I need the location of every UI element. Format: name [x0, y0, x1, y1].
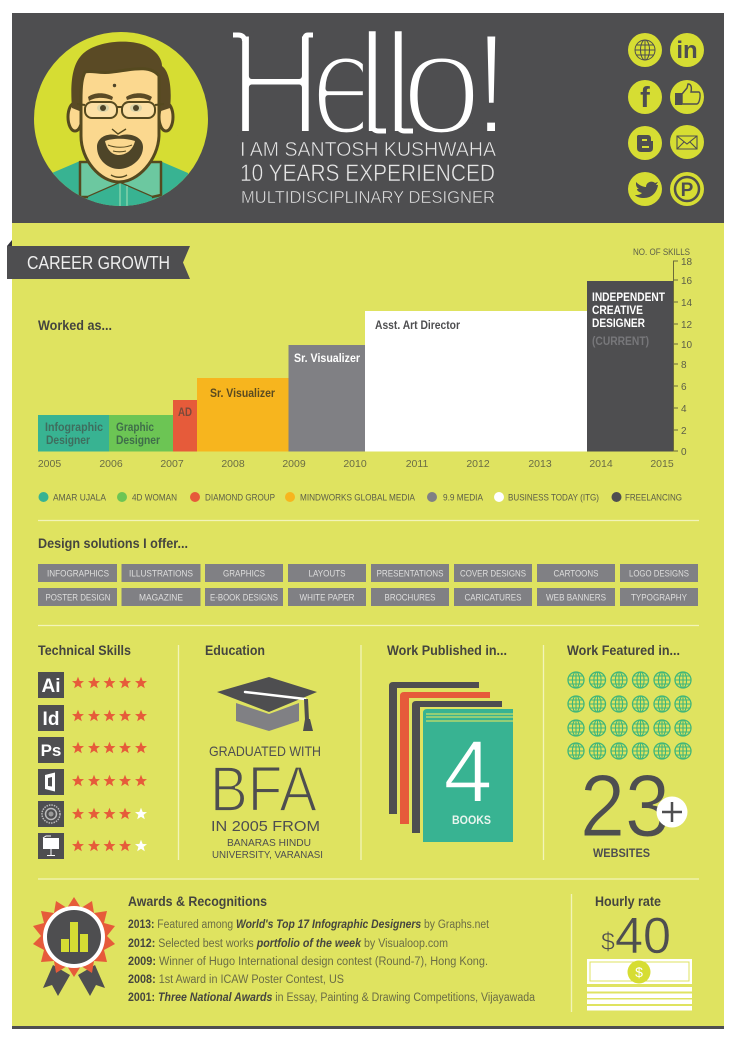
year labels: 2007 — [160, 458, 184, 470]
service tags: LOGO DESIGNS — [629, 568, 689, 580]
awards and recognitions: 2012: Selected best works portfolio of the week by Visualoop.com — [128, 938, 448, 950]
bar: Asst. Art Director — [365, 311, 587, 452]
heading: design solutions: Design solutions I offer... — [38, 536, 188, 551]
plus badge — [656, 796, 688, 828]
education text — [209, 743, 323, 861]
bar: Infographic Designer — [38, 415, 109, 452]
year labels — [38, 458, 674, 470]
icon: blogger — [628, 126, 662, 160]
ribbon heading: career growth: CAREER GROWTH — [27, 252, 170, 273]
book stack — [389, 682, 513, 842]
panel: work featured — [567, 643, 691, 860]
education text: IN 2005 FROM — [211, 818, 320, 835]
bar: Infographic Designer: Designer — [46, 433, 90, 447]
website count: 23 — [580, 756, 670, 855]
bar: Independent Creative Designer — [587, 281, 673, 452]
panel: education — [205, 643, 323, 861]
skills axis: 18 — [681, 257, 693, 268]
panel: work published: Work Published in... — [387, 643, 507, 658]
chart legend: FREELANCING — [625, 492, 682, 504]
icon: linkedin: in — [676, 37, 698, 64]
bar: Sr. Visualizer orange — [197, 378, 288, 452]
skill icon: InDesign: Id — [43, 709, 59, 730]
bar: AD: AD — [178, 405, 192, 419]
icon: award medal — [33, 897, 115, 996]
service tags: CARICATURES — [464, 592, 522, 604]
header panel — [12, 2, 724, 223]
career bar chart — [38, 247, 693, 470]
title: Hello!: l — [356, 2, 388, 165]
title: Hello!: H — [229, 3, 322, 166]
heading: worked as: Worked as... — [38, 318, 112, 333]
education text: BANARAS HINDU — [227, 837, 311, 849]
subtitle lines: 10 YEARS EXPERIENCED — [240, 160, 495, 187]
icon: pinterest — [670, 172, 704, 206]
service tags: CARTOONS — [554, 568, 598, 580]
panel: hourly rate — [587, 894, 692, 1010]
globe grid — [568, 672, 691, 759]
skill icon: Presentation — [38, 833, 64, 859]
bar: Graphic Designer — [109, 415, 173, 452]
skills axis: NO. OF SKILLS — [633, 247, 690, 257]
service tags: WHITE PAPER — [300, 592, 355, 604]
service tags — [38, 564, 698, 606]
bar: Infographic Designer: Infographic — [45, 420, 103, 434]
bar: Independent Creative Designer: DESIGNER — [592, 316, 645, 330]
subtitle lines — [240, 139, 497, 207]
bar: Independent Creative Designer: (CURRENT) — [592, 334, 649, 348]
icon: cash stack: $ — [635, 964, 643, 980]
bar: Asst. Art Director: Asst. Art Director — [375, 318, 460, 332]
bar: Independent Creative Designer: INDEPENDENT — [592, 290, 666, 304]
year labels: 2010 — [343, 458, 367, 470]
year labels: 2012 — [466, 458, 490, 470]
icon: mail — [670, 125, 704, 159]
education text: GRADUATED WITH — [209, 743, 321, 759]
skills axis: 2 — [681, 426, 687, 437]
awards and recognitions: 2013: Featured among World's Top 17 Infographic Designers by Graphs.net — [128, 919, 490, 931]
skills axis: 10 — [681, 340, 693, 351]
skills axis: 0 — [681, 447, 687, 458]
chart legend — [38, 492, 682, 504]
skills axis: 4 — [681, 404, 687, 415]
subtitle lines: MULTIDISCIPLINARY DESIGNER — [241, 187, 495, 207]
skill icon: Photoshop — [38, 737, 64, 763]
year labels: 2006 — [99, 458, 123, 470]
panel: technical skills: Technical Skills — [38, 643, 131, 658]
title: Hello!: o — [401, 2, 482, 165]
icon: thumbs up — [670, 80, 704, 114]
chart legend: AMAR UJALA — [53, 492, 107, 504]
chart legend: DIAMOND GROUP — [205, 492, 275, 504]
chart legend: MINDWORKS GLOBAL MEDIA — [300, 492, 416, 504]
body panel — [12, 223, 724, 1027]
education text: UNIVERSITY, VARANASI — [212, 849, 323, 861]
service tags: MAGAZINE — [139, 592, 183, 604]
skills axis: 16 — [681, 276, 693, 287]
avatar portrait — [34, 32, 208, 210]
awards and recognitions: 2001: Three National Awards in Essay, Painting & Drawing Competitions, Vijayawada — [128, 992, 536, 1004]
awards and recognitions: 2009: Winner of Hugo International design contest (Round-7), Hong Kong. — [128, 956, 488, 968]
service tags: TYPOGRAPHY — [631, 592, 688, 604]
awards and recognitions: 2008: 1st Award in ICAW Poster Contest, US — [128, 974, 344, 986]
chart legend: BUSINESS TODAY (ITG) — [508, 492, 599, 504]
panel: work published — [387, 643, 513, 842]
icon: twitter — [628, 172, 662, 206]
panel: hourly rate: Hourly rate — [595, 894, 661, 909]
panel: education: Education — [205, 643, 265, 658]
awards and recognitions — [128, 894, 536, 1004]
bar: Sr. Visualizer grey: Sr. Visualizer — [294, 351, 360, 365]
title: Hello! — [229, 2, 512, 166]
year labels: 2015 — [650, 458, 674, 470]
title: Hello!: l — [382, 2, 414, 165]
service tags: COVER DESIGNS — [460, 568, 526, 580]
book stack: BOOKS — [452, 813, 491, 827]
skill icon: InDesign — [38, 705, 64, 731]
bar: Graphic Designer: Graphic — [116, 420, 154, 434]
icon: facebook — [628, 80, 662, 114]
skill icon: Office — [38, 769, 64, 795]
skills axis: 6 — [681, 382, 687, 393]
icon: facebook: f — [640, 82, 650, 114]
icon: globe — [628, 33, 662, 67]
icon: graduation cap — [217, 677, 317, 731]
skill icon: Illustrator — [38, 672, 64, 698]
education text: BFA — [210, 753, 317, 825]
service tags: INFOGRAPHICS — [47, 568, 109, 580]
service tags: WEB BANNERS — [546, 592, 606, 604]
ribbon heading: career growth — [7, 240, 190, 279]
awards and recognitions: Awards & Recognitions — [128, 894, 267, 909]
skills axis: 14 — [681, 298, 693, 309]
panel: work featured: WEBSITES — [593, 846, 650, 860]
rate amount: 40 — [615, 907, 671, 964]
icon: pinterest: P — [681, 180, 694, 201]
bar: Graphic Designer: Designer — [116, 433, 160, 447]
star ratings — [72, 677, 147, 851]
chart legend: 9.9 MEDIA — [443, 492, 484, 504]
skill icon: Corel — [38, 801, 64, 827]
service tags: PRESENTATIONS — [376, 568, 444, 580]
rate amount: $ — [601, 928, 615, 956]
year labels: 2008 — [221, 458, 245, 470]
subtitle lines: I AM SANTOSH KUSHWAHA — [240, 139, 497, 161]
bar: Sr. Visualizer grey — [288, 345, 365, 452]
year labels: 2011 — [406, 458, 428, 470]
year labels: 2013 — [528, 458, 552, 470]
skills axis: 12 — [681, 320, 693, 331]
skill icon: Photoshop: Ps — [41, 741, 61, 760]
bar: Sr. Visualizer orange: Sr. Visualizer — [210, 386, 275, 400]
icon: linkedin — [670, 33, 704, 67]
service tags: BROCHURES — [384, 592, 436, 604]
year labels: 2005 — [38, 458, 61, 470]
year labels: 2009 — [282, 458, 306, 470]
service tags: GRAPHICS — [223, 568, 265, 580]
service tags: E-BOOK DESIGNS — [210, 592, 278, 604]
service tags: POSTER DESIGN — [46, 592, 111, 604]
year labels: 2014 — [589, 458, 613, 470]
panel: technical skills — [38, 643, 147, 859]
skills axis: 8 — [681, 360, 687, 371]
title: Hello!: ! — [471, 2, 512, 165]
panel: work featured: Work Featured in... — [567, 643, 680, 658]
chart legend: 4D WOMAN — [132, 492, 177, 504]
bar: Independent Creative Designer: CREATIVE — [592, 303, 643, 317]
book count: 4 — [444, 722, 492, 821]
service tags: ILLUSTRATIONS — [129, 568, 193, 580]
skills axis — [633, 247, 693, 458]
bar: AD — [173, 400, 197, 452]
skill icon: Illustrator: Ai — [42, 676, 60, 697]
social icons — [628, 33, 704, 206]
bottom edge bar — [12, 1026, 724, 1029]
service tags: LAYOUTS — [308, 568, 346, 580]
title: Hello!: e — [311, 2, 381, 165]
